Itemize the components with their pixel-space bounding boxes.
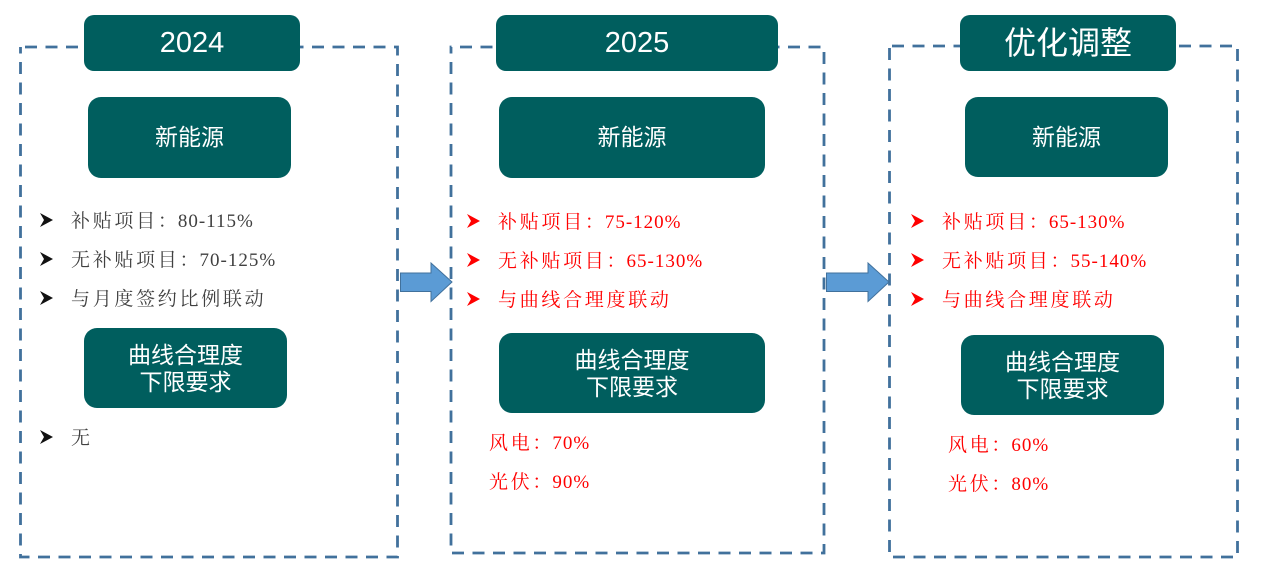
heading: 2025: [496, 15, 778, 71]
bullet: subsidised 2024: [40, 211, 254, 232]
box: new energy optimization: [965, 97, 1168, 177]
text: wind optimization: 风电：60%: [948, 435, 1049, 456]
box: curve lower limit 2024: 曲线合理度: [128, 342, 243, 368]
bullet: subsidised 2025: [467, 212, 681, 233]
bullet: monthly link 2024: [40, 288, 266, 310]
box: new energy 2024: 新能源: [155, 124, 224, 150]
text: 与曲线合理度联动: [498, 290, 672, 311]
heading: optimization: 优化调整: [1004, 24, 1132, 60]
box: curve lower limit 2025: 曲线合理度: [574, 347, 690, 373]
heading: 2025: 2025: [605, 27, 669, 59]
text: 无: [71, 428, 93, 449]
text: solar optimization: 光伏：80%: [948, 474, 1049, 495]
box: curve lower limit optimization: 下限要求: [1016, 376, 1108, 402]
text: 与曲线合理度联动: [942, 290, 1116, 311]
box: curve lower limit optimization: [961, 335, 1164, 415]
text: 补贴项目：65-130%: [942, 212, 1125, 233]
bullet: unsubsidised 2024: [40, 250, 276, 271]
box: new energy 2024: [88, 97, 291, 178]
text: 补贴项目：80-115%: [71, 211, 254, 232]
text: wind 2025: 风电：70%: [489, 433, 590, 454]
box: curve lower limit 2024: 下限要求: [140, 369, 232, 395]
heading: 2024: [84, 15, 300, 71]
bullet: unsubsidised 2025: [467, 251, 703, 272]
box: curve lower limit 2024: [84, 328, 287, 408]
text: 与月度签约比例联动: [71, 289, 266, 310]
box: new energy 2025: [499, 97, 765, 178]
bullet: subsidised optimization: [911, 212, 1125, 233]
arrow: 2024 to 2025: [400, 262, 453, 302]
heading: 2024: 2024: [160, 27, 224, 59]
arrow: 2025 to optimization: [826, 262, 888, 302]
box: new energy optimization: 新能源: [1032, 124, 1101, 150]
text: 无补贴项目：55-140%: [942, 251, 1147, 272]
text: 无补贴项目：70-125%: [71, 250, 276, 271]
bullet: curve link optimization: [911, 290, 1116, 311]
bullet: none 2024: [40, 428, 93, 449]
text: 无补贴项目：65-130%: [498, 251, 703, 272]
text: solar 2025: 光伏：90%: [489, 472, 590, 493]
box: curve lower limit 2025: 下限要求: [586, 374, 678, 400]
bullet: unsubsidised optimization: [911, 251, 1147, 272]
box: new energy 2025: 新能源: [598, 124, 666, 150]
bullet: curve link 2025: [467, 290, 672, 311]
box: curve lower limit 2025: [499, 333, 765, 413]
heading: optimization: [960, 15, 1176, 71]
text: 补贴项目：75-120%: [498, 212, 681, 233]
box: curve lower limit optimization: 曲线合理度: [1005, 349, 1120, 375]
